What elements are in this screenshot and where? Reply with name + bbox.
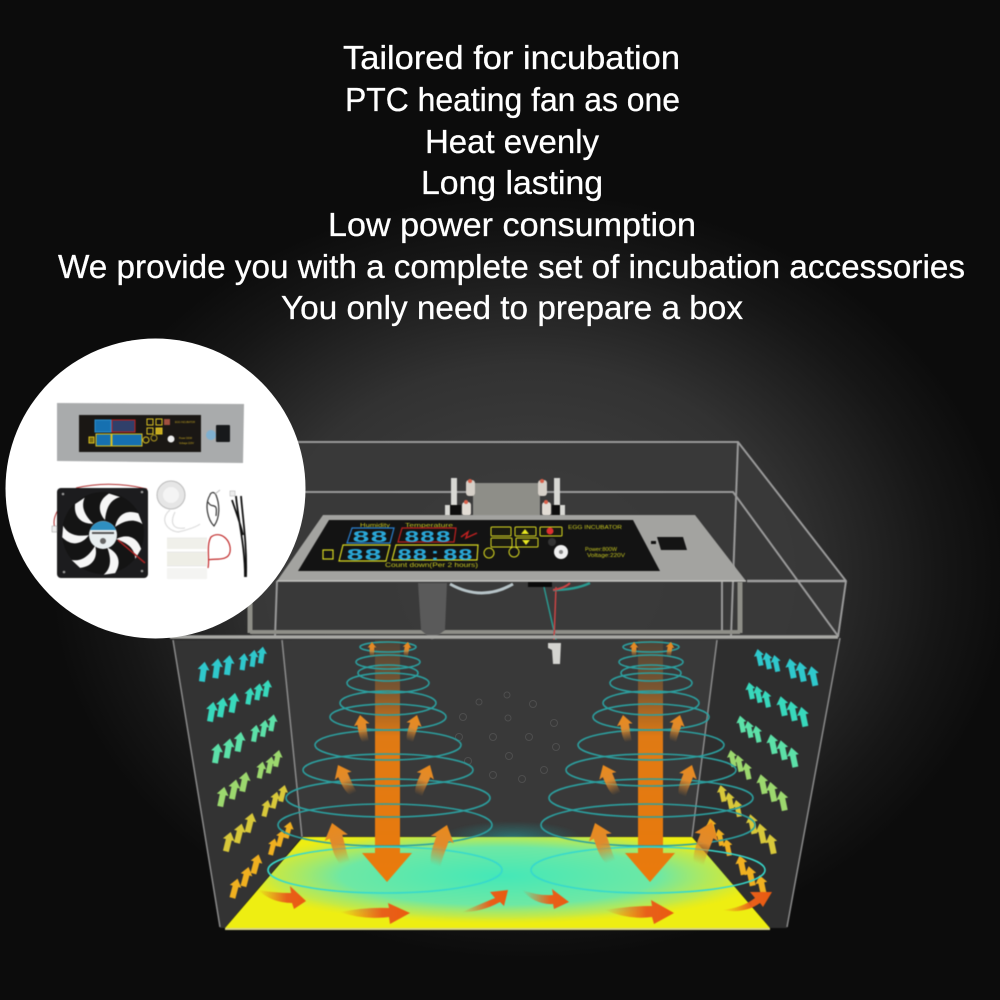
left airflow arrow	[362, 640, 412, 882]
left rising arrows	[320, 641, 459, 868]
panel display: Voltage:220V	[587, 553, 626, 559]
temperature probe	[230, 491, 246, 577]
heading text: Tailored for incubation	[343, 39, 680, 76]
product circle	[6, 338, 306, 638]
panel display: 88	[346, 547, 382, 566]
bracket behind panel	[445, 478, 565, 516]
controller plate	[57, 403, 244, 463]
panel display: 888	[404, 529, 451, 548]
left heat rings	[268, 642, 502, 893]
heading text: Low power consumption	[328, 206, 696, 243]
right wall arrows	[705, 648, 821, 896]
cooling fan	[52, 484, 148, 578]
panel display: Temperature	[405, 523, 453, 529]
right airflow arrow	[625, 640, 675, 882]
heading text: You only need to prepare a box	[281, 289, 743, 326]
heater strips	[167, 535, 230, 579]
sensor wire coil	[207, 490, 220, 526]
right rising arrows	[584, 641, 724, 867]
panel display: Power:800W	[585, 547, 617, 553]
under-panel parts: fan, tube, wires	[418, 582, 590, 640]
panel display: 88	[352, 529, 388, 548]
heading text	[58, 39, 965, 326]
wall vent holes	[456, 692, 560, 782]
controller plate: EGG INCUBATOR	[175, 420, 196, 424]
panel display: EGG INCUBATOR	[568, 525, 622, 531]
left wall arrows	[196, 646, 295, 900]
back wall and side walls	[170, 637, 840, 928]
floor arrows	[258, 886, 772, 924]
wire connector	[548, 643, 561, 664]
heading text: PTC heating fan as one	[345, 81, 680, 118]
panel display: Humidity	[360, 523, 391, 529]
panel display: Count down(Per 2 hours)	[385, 563, 478, 569]
panel display	[298, 520, 660, 571]
heated floor	[225, 821, 770, 929]
panel socket	[651, 537, 687, 550]
controller plate: Power:300W	[179, 436, 192, 440]
heading text: Long lasting	[421, 164, 603, 201]
controller plate: Voltage:220V	[179, 441, 194, 445]
panel display: 88:88	[397, 547, 473, 566]
control panel top	[277, 515, 746, 581]
acrylic box upper section	[250, 442, 846, 637]
turning motor	[157, 481, 200, 532]
heading text: We provide you with a complete set of incubation accessories	[58, 248, 965, 285]
heading text: Heat evenly	[425, 123, 599, 160]
right heat rings	[531, 642, 765, 893]
